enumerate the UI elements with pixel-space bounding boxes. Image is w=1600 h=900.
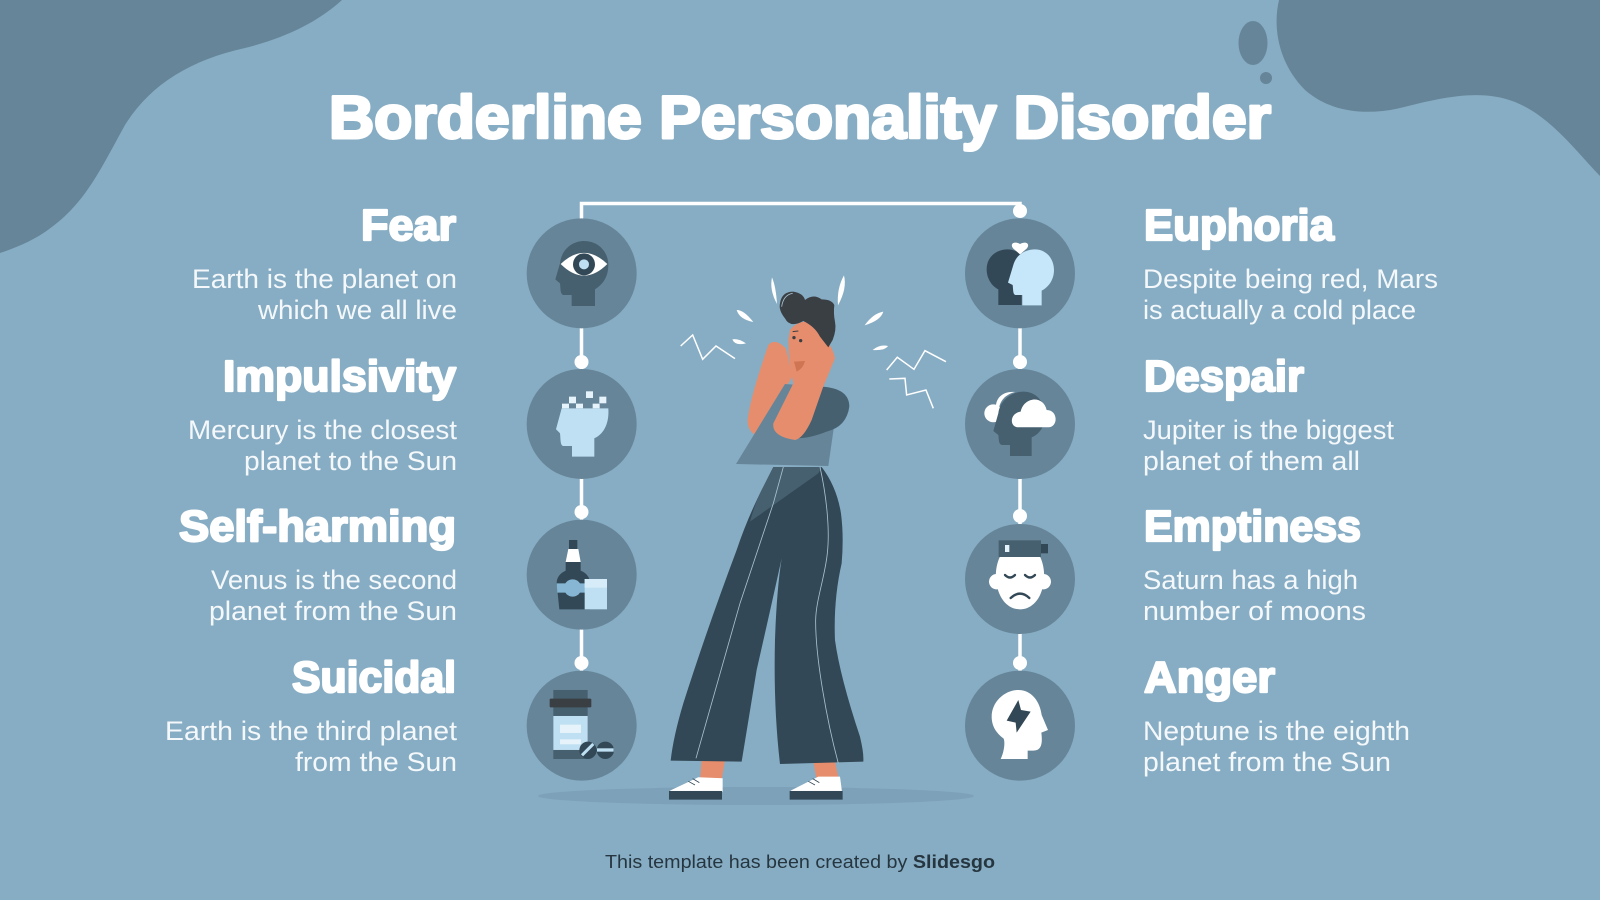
heading: fear: Fear [361,201,456,250]
node: dots left [574,355,588,670]
heading: suicidal: Suicidal [292,653,456,702]
description: impulsivity [188,415,458,476]
left text: suicidal [165,653,458,777]
description: impulsivity: planet to the Sun [244,446,457,476]
background blob: top left [0,0,342,253]
circle icon: emptiness [965,524,1075,634]
background blob: top right [1277,0,1600,176]
description: fear [192,264,457,325]
description: despair [1143,415,1395,476]
right text: despair [1143,352,1395,476]
left column: circles and icons [527,218,637,781]
description: euphoria [1143,264,1438,325]
description: euphoria: Despite being red, Mars [1143,264,1438,294]
left text: impulsivity [188,352,458,476]
right text: emptiness [1143,502,1366,626]
heading: despair: Despair [1144,352,1304,401]
heading: euphoria: Euphoria [1144,201,1335,250]
heading: impulsivity: Impulsivity [223,352,457,401]
character: legs [669,467,863,800]
title: Borderline Personality Disorder [329,84,1271,151]
description: anger [1143,716,1410,777]
character: stress marks [681,275,946,408]
description: impulsivity: Mercury is the closest [188,415,458,445]
description: emptiness [1143,565,1366,626]
description: emptiness: Saturn has a high [1143,565,1358,595]
left text: fear [192,201,457,325]
circle icon: despair [965,369,1075,479]
circle icon: euphoria [965,218,1075,328]
node: dots right [1013,204,1027,670]
floor shadow [538,787,974,805]
description: self-harming [209,565,457,626]
circle icon: anger [965,671,1075,781]
circle icon: impulsivity [527,369,637,479]
character illustration [669,275,946,800]
description: suicidal: Earth is the third planet [165,716,458,746]
connector lines [582,204,1020,725]
description: fear: Earth is the planet on [192,264,457,294]
description: fear: which we all live [257,295,457,325]
description: suicidal [165,716,458,777]
left text: self-harming [179,502,457,626]
heading: self-harming: Self-harming [179,502,456,551]
description: despair: Jupiter is the biggest [1143,415,1395,445]
thought bubbles [1238,21,1272,84]
description: despair: planet of them all [1143,446,1360,476]
circle icon: suicidal [527,671,637,781]
description: anger: Neptune is the eighth [1143,716,1410,746]
heading: emptiness: Emptiness [1144,502,1361,551]
footer credit: This template has been created by Slidesgo [605,852,995,872]
description: emptiness: number of moons [1143,596,1366,626]
right text: euphoria [1143,201,1438,325]
heading: anger: Anger [1144,653,1275,702]
character: torso and head [736,292,849,466]
right text: anger [1143,653,1410,777]
circle icon: self-harming [527,520,637,630]
right column: circles and icons [965,204,1075,781]
circle icon: fear [527,218,637,328]
description: self-harming: Venus is the second [211,565,457,595]
description: self-harming: planet from the Sun [209,596,457,626]
description: anger: planet from the Sun [1143,747,1391,777]
description: suicidal: from the Sun [295,747,457,777]
description: euphoria: is actually a cold place [1143,295,1416,325]
